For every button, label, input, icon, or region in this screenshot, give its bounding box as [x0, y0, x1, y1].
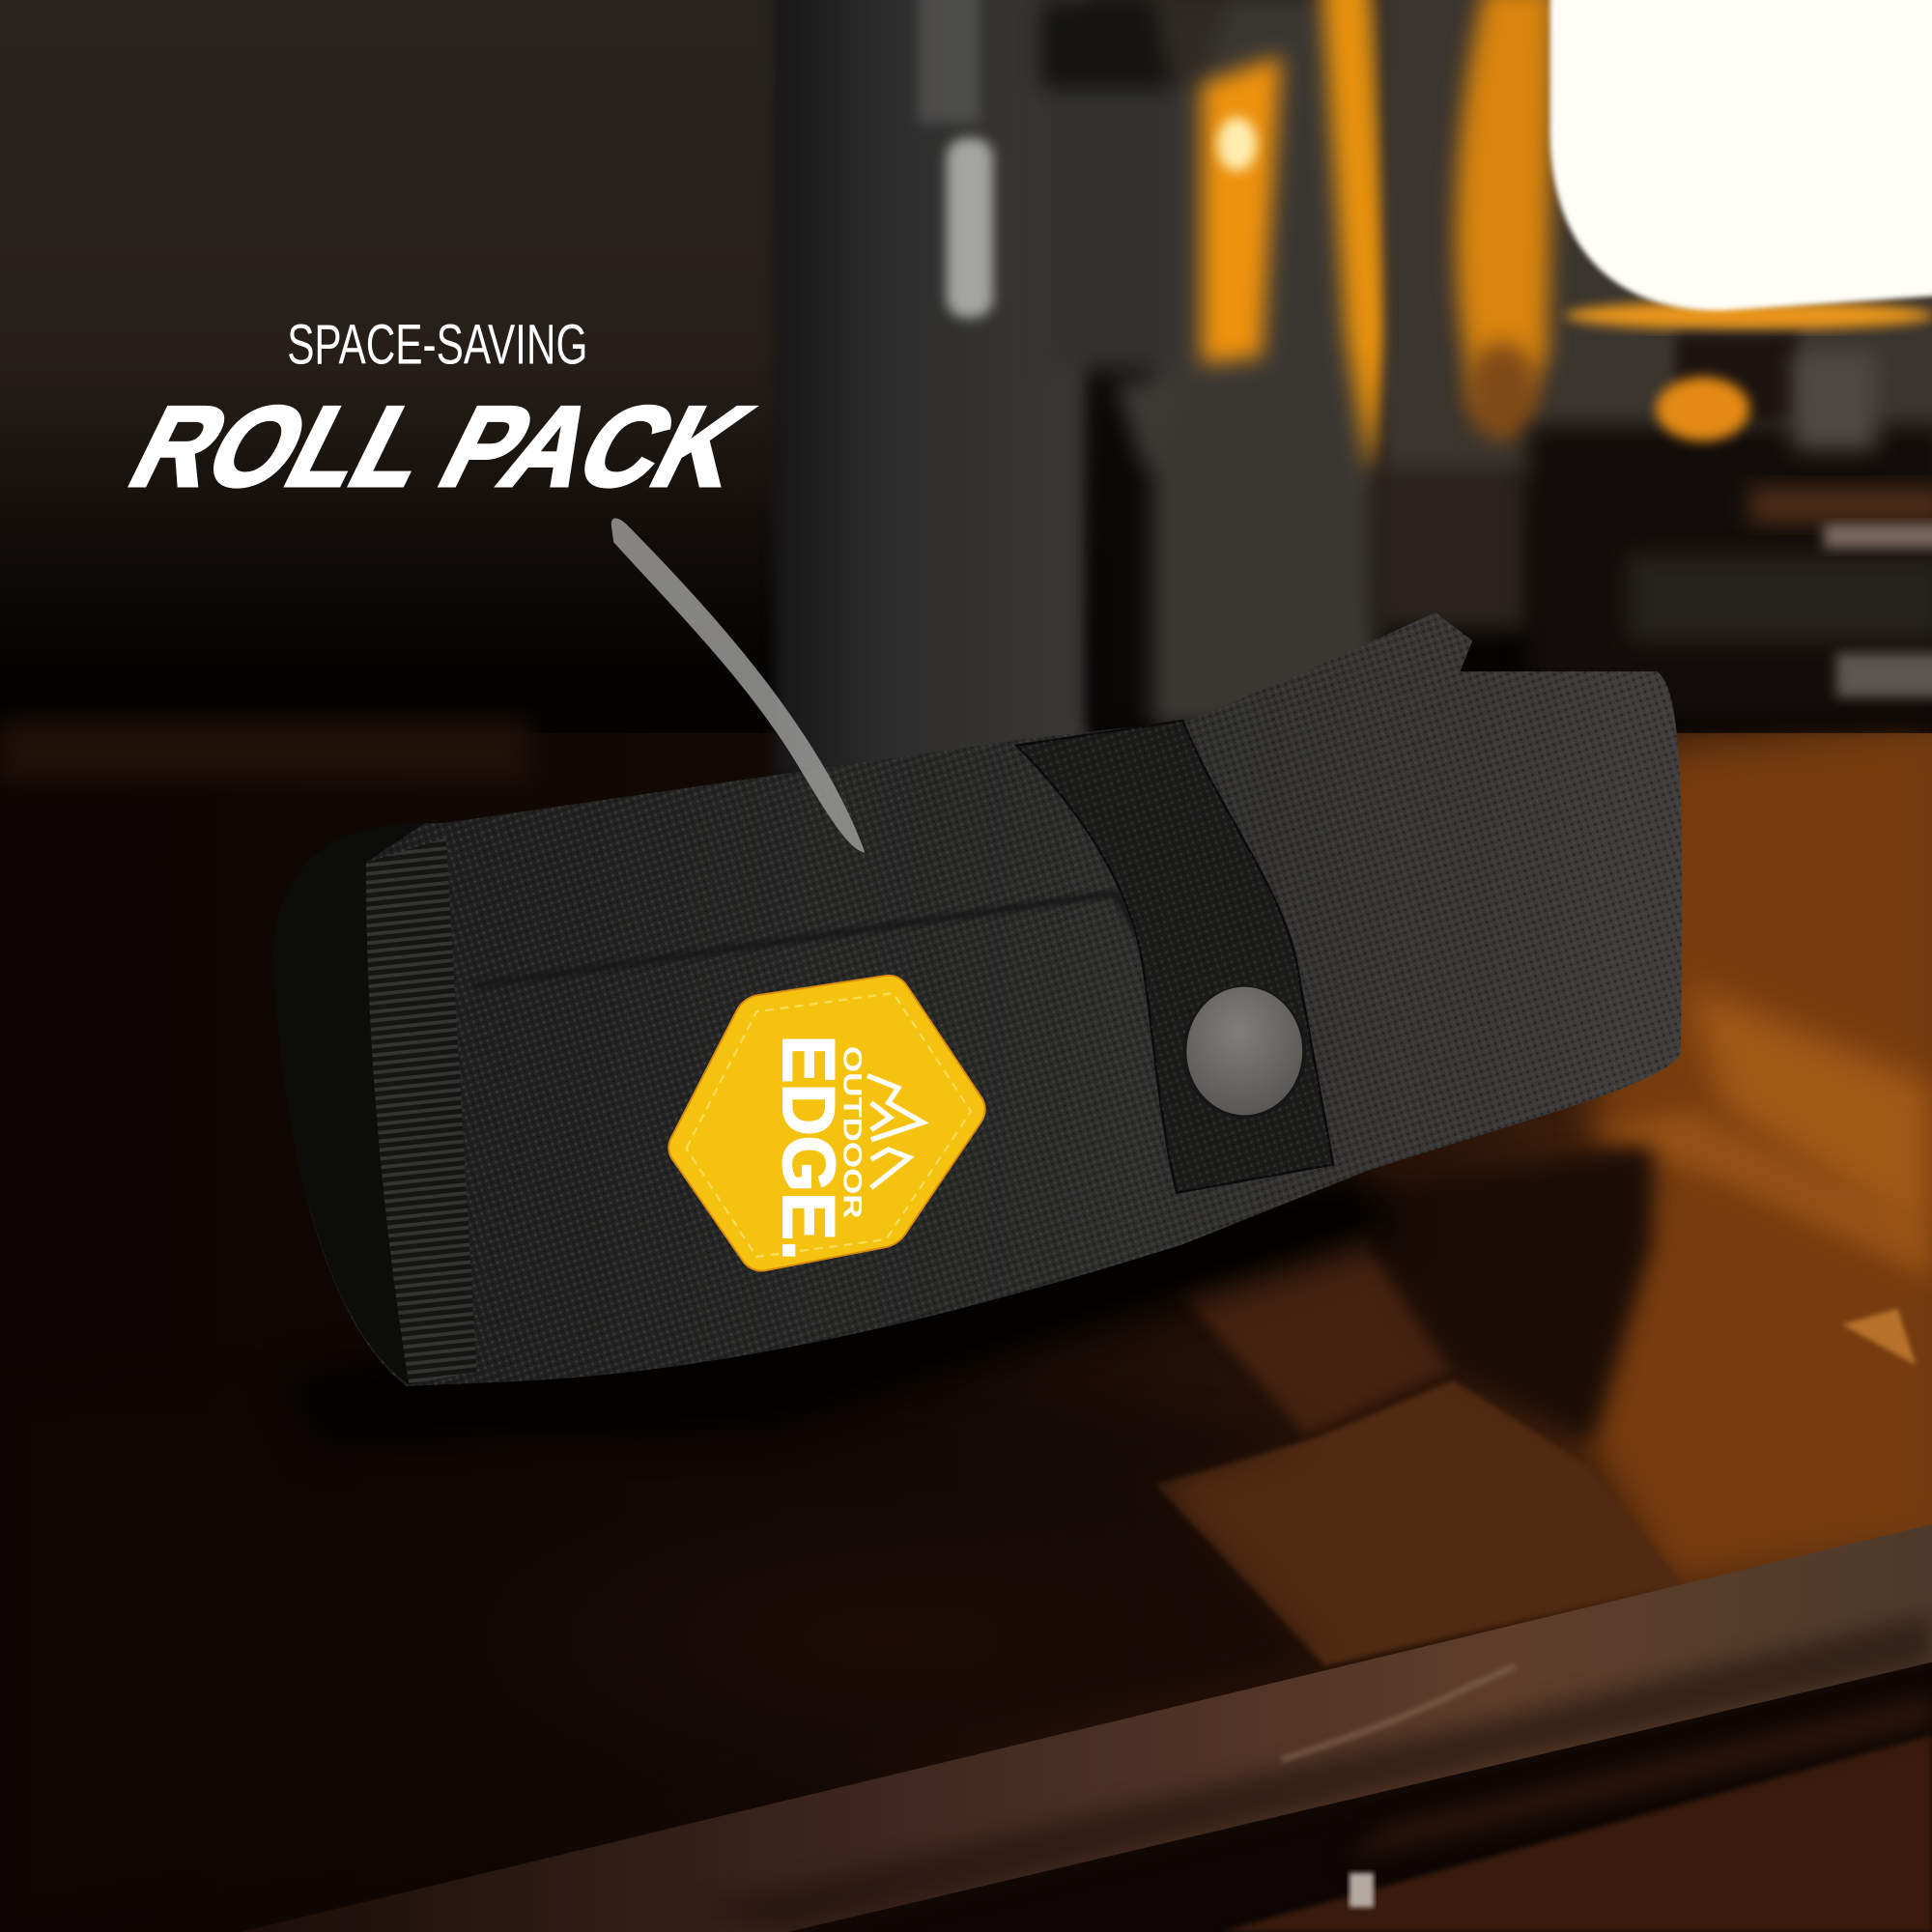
yellow hexagon logo patch: EDGE. [767, 1035, 849, 1261]
pack body [273, 612, 1682, 1386]
background binocular [1041, 0, 1378, 727]
logo wordmark: OUTDOOR [838, 1046, 867, 1218]
table edge [241, 1524, 1932, 1932]
callout pointer line [611, 518, 865, 853]
background wall [0, 0, 1932, 788]
callout subtitle: SPACE-SAVING [287, 313, 587, 376]
fold line [474, 894, 1140, 985]
shadow [283, 1171, 1405, 1448]
wooden table [0, 721, 1932, 1932]
binocular orange reflections [1202, 0, 1392, 480]
snap button [1182, 985, 1306, 1119]
background bottle [774, 0, 1088, 777]
callout title: ROLL PACK [111, 384, 769, 510]
strap [1016, 721, 1333, 1193]
roll pack [273, 612, 1682, 1448]
yellow hexagon logo patch [668, 976, 985, 1271]
lantern [1373, 0, 1932, 721]
webbing at left end [366, 838, 477, 1385]
logo mountains [867, 1076, 923, 1188]
